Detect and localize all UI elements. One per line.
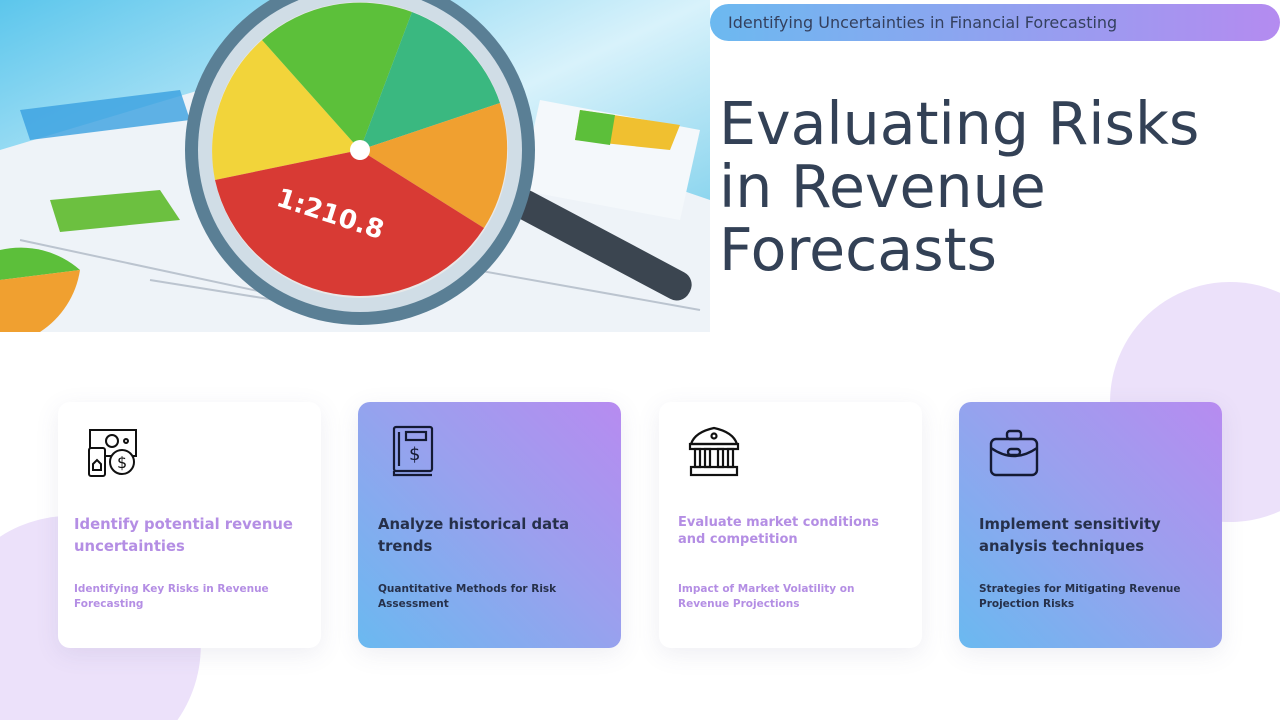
card title: Analyze historical data trends	[378, 516, 569, 555]
card 2	[358, 402, 621, 648]
card subtitle: Quantitative Methods for Risk Assessment	[378, 583, 556, 610]
card 1	[58, 402, 321, 648]
card subtitle: Identifying Key Risks in Revenue Forecasting	[74, 583, 269, 610]
header pill: Identifying Uncertainties in Financial Forecasting	[728, 13, 1117, 32]
card subtitle: Impact of Market Volatility on Revenue Projections	[678, 583, 854, 610]
icon: money and phone: $	[117, 453, 127, 472]
card title: Evaluate market conditions and competition	[678, 515, 879, 547]
icon: money and phone	[88, 429, 137, 477]
card subtitle: Strategies for Mitigating Revenue Projection Risks	[979, 583, 1181, 610]
card 4	[959, 402, 1222, 648]
hero image: magnifying glass over charts	[0, 0, 710, 332]
icon: finance book	[392, 426, 434, 476]
icon: bank building	[688, 426, 740, 476]
header pill	[710, 4, 1280, 41]
card title: Implement sensitivity analysis techniques	[979, 516, 1161, 555]
card 3	[659, 402, 922, 648]
card title: Identify potential revenue uncertainties	[74, 516, 293, 555]
icon: finance book: $	[409, 444, 420, 465]
icon: briefcase	[990, 430, 1038, 476]
title: Evaluating Risks in Revenue Forecasts	[719, 90, 1199, 284]
hero image: magnifying glass over charts: 1:210.8	[273, 183, 387, 246]
